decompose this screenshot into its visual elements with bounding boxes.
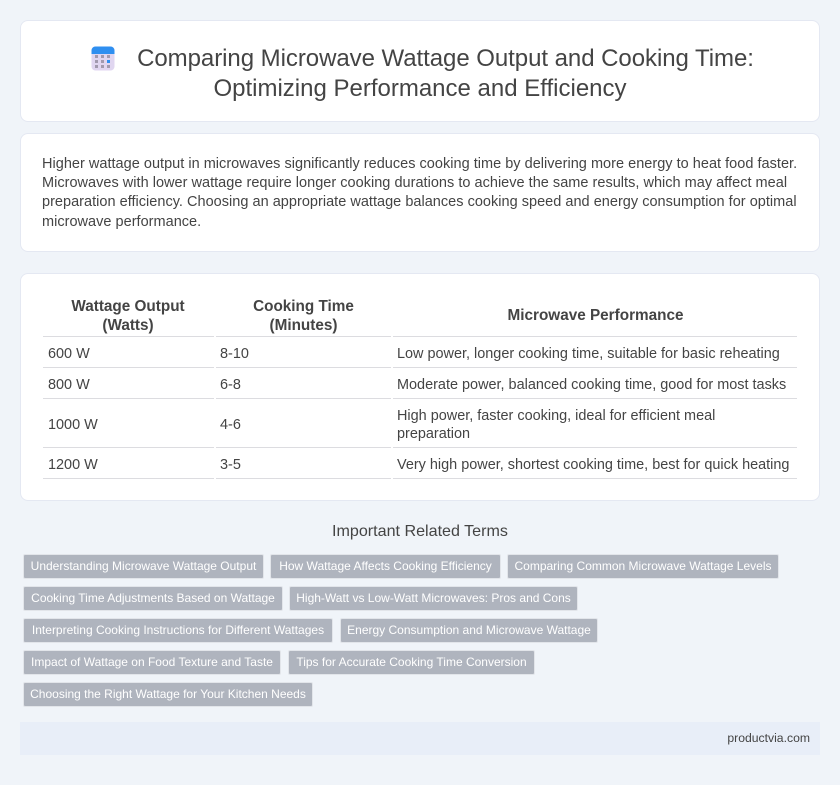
- title: Comparing Microwave Wattage Output and Cooking Time:: [137, 45, 754, 72]
- column heading: cooking time: Cooking Time: [253, 298, 354, 315]
- table: High power, faster cooking, ideal for efficient meal: [397, 408, 715, 424]
- tags: related terms: Impact of Wattage on Food Texture and Taste: [31, 655, 273, 669]
- table: 6-8: [220, 377, 241, 393]
- tags: related terms: Tips for Accurate Cooking Time Conversion: [296, 655, 527, 669]
- panel: header: [20, 20, 820, 122]
- tags: related terms: Energy Consumption and Microwave Wattage: [347, 623, 591, 637]
- table: 1200 W: [48, 457, 98, 473]
- table: 600 W: [48, 346, 90, 362]
- title: [137, 45, 754, 102]
- column heading: wattage: Wattage Output: [71, 298, 185, 315]
- tags: related terms: How Wattage Affects Cooking Efficiency: [279, 559, 492, 573]
- footer bar: [20, 722, 820, 755]
- table: 1000 W: [48, 417, 98, 433]
- table: [43, 298, 797, 479]
- tags: related terms: Cooking Time Adjustments Based on Wattage: [31, 591, 275, 605]
- tags: related terms: Choosing the Right Wattage for Your Kitchen Needs: [30, 687, 306, 701]
- column heading: wattage: [71, 298, 185, 334]
- table: Very high power, shortest cooking time, best for quick heating: [397, 457, 789, 473]
- icon: calendar grid: [92, 46, 114, 70]
- text block: introduction: microwave performance.: [42, 214, 201, 230]
- table: preparation: [397, 426, 470, 442]
- panel: comparison table: [20, 273, 820, 501]
- table: 8-10: [220, 346, 249, 362]
- table: Moderate power, balanced cooking time, good for most tasks: [397, 377, 786, 393]
- table: 3-5: [220, 457, 241, 473]
- tags: related terms: High-Watt vs Low-Watt Microwaves: Pros and Cons: [296, 591, 571, 605]
- tags: related terms: Understanding Microwave Wattage Output: [31, 559, 256, 573]
- text block: introduction: Higher wattage output in microwaves significantly reduces cooking time by delivering more energy to heat food faster.: [42, 156, 797, 172]
- column heading: cooking time: (Minutes): [270, 317, 337, 334]
- table: 4-6: [220, 417, 241, 433]
- column heading: performance: Microwave Performance: [508, 307, 684, 324]
- column heading: wattage: (Watts): [102, 317, 154, 334]
- tags: related terms: Interpreting Cooking Instructions for Different Wattages: [32, 623, 324, 637]
- tags: related terms: Comparing Common Microwave Wattage Levels: [514, 559, 772, 573]
- panel: introduction: [20, 133, 820, 252]
- text block: introduction: Microwaves with lower wattage require longer cooking durations to achieve the same results, which may affect meal: [42, 175, 787, 191]
- footer: source: productvia.com: [727, 731, 810, 745]
- title: Optimizing Performance and Efficiency: [213, 75, 627, 102]
- column heading: cooking time: [253, 298, 354, 334]
- tags: related terms: [23, 554, 779, 707]
- text block: introduction: preparation efficiency. Choosing an appropriate wattage balances cooking speed and energy consumption for optimal: [42, 194, 797, 210]
- table: 800 W: [48, 377, 90, 393]
- text block: introduction: [42, 156, 797, 230]
- table: Low power, longer cooking time, suitable for basic reheating: [397, 346, 780, 362]
- heading: related terms: Important Related Terms: [332, 522, 508, 540]
